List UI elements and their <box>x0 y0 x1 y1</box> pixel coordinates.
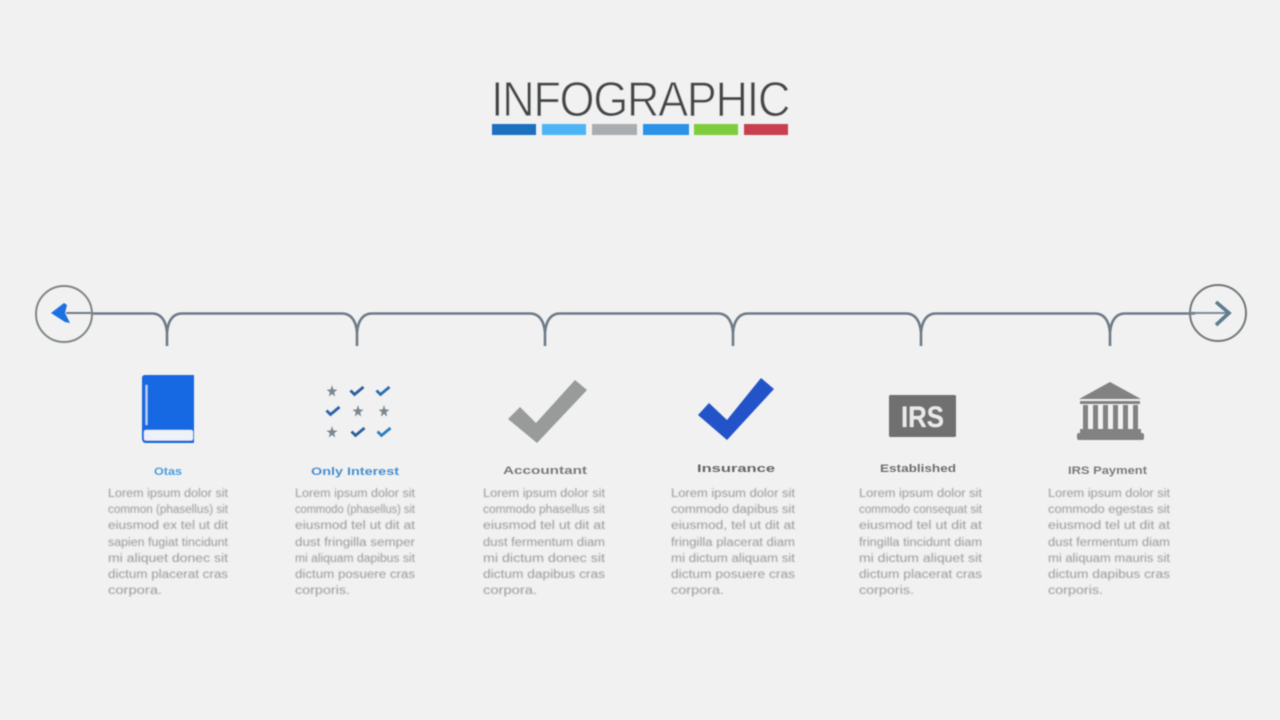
column 4: blue check <box>671 378 796 597</box>
body text: fringilla tincidunt diam <box>859 537 982 549</box>
body text: mi dictum donec sit <box>483 553 606 565</box>
body text: Lorem ipsum dolor sit <box>108 488 229 500</box>
heading: Established <box>880 463 956 475</box>
body text: eiusmod ex tel ut dit <box>108 520 229 532</box>
body text: Lorem ipsum dolor sit <box>1048 488 1171 500</box>
body text <box>1048 488 1171 597</box>
column 5: IRS <box>859 395 983 597</box>
body text: mi aliquet donec sit <box>108 553 229 565</box>
body text: corpora. <box>108 585 162 597</box>
icon: blue book <box>142 375 194 443</box>
body text: Lorem ipsum dolor sit <box>483 488 606 500</box>
icon: IRS badge: IRS <box>901 401 944 434</box>
body text: sapien fugiat tincidunt <box>108 537 229 549</box>
body text <box>108 488 229 597</box>
body text: fringilla placerat diam <box>671 537 795 549</box>
body text: eiusmod tel ut dit at <box>1048 520 1171 532</box>
column 6: bank <box>1048 382 1171 597</box>
body text: eiusmod, tel ut dit at <box>671 520 796 532</box>
timeline with six branches <box>92 314 1195 346</box>
body text <box>295 488 416 597</box>
title: INFOGRAPHIC <box>491 73 789 127</box>
body text: mi dictum aliquam sit <box>671 553 796 565</box>
heading: Insurance <box>697 463 775 475</box>
icon: blue check mark <box>698 378 774 440</box>
body text: corporis. <box>1048 585 1103 597</box>
body text: dictum dapibus cras <box>1048 569 1170 581</box>
body text: dust fringilla semper <box>295 537 415 549</box>
icon: right arrow circle <box>1190 285 1246 341</box>
body text: dust fermentum diam <box>483 537 605 549</box>
heading: Accountant <box>503 465 587 477</box>
icon: grid of checks and stars <box>326 385 390 438</box>
column 3: gray check <box>483 380 606 597</box>
body text <box>483 488 606 597</box>
body text: mi dictum aliquet sit <box>859 553 983 565</box>
icon: gray check mark <box>508 380 587 443</box>
body text: corpora. <box>483 585 537 597</box>
body text: common (phasellus) sit <box>108 504 229 516</box>
colour bar strip <box>492 124 788 135</box>
icon: bank building <box>1077 382 1144 440</box>
body text: eiusmod tel ut dit at <box>483 520 606 532</box>
column 2: checklist <box>295 385 416 597</box>
body text: commodo dapibus sit <box>671 504 796 516</box>
body text: dictum posuere cras <box>295 569 415 581</box>
body text: eiusmod tel ut dit at <box>295 520 416 532</box>
body text: commodo consequat sit <box>859 504 983 516</box>
body text: dictum placerat cras <box>859 569 982 581</box>
body text: dust fermentum diam <box>1048 537 1170 549</box>
body text: eiusmod tel ut dit at <box>859 520 983 532</box>
icon: IRS badge <box>889 395 956 437</box>
icon: left arrow circle <box>36 286 92 342</box>
body text: corporis. <box>859 585 914 597</box>
body text: corporis. <box>295 585 350 597</box>
body text: mi aliquam dapibus sit <box>295 553 416 565</box>
body text: corpora. <box>671 585 724 597</box>
body text: Lorem ipsum dolor sit <box>859 488 983 500</box>
heading: Otas <box>154 466 182 478</box>
body text: commodo phasellus sit <box>483 504 606 516</box>
body text: dictum posuere cras <box>671 569 795 581</box>
heading: Only Interest <box>311 466 399 478</box>
column 1: book <box>108 375 229 597</box>
body text: dictum placerat cras <box>108 569 228 581</box>
body text: Lorem ipsum dolor sit <box>671 488 796 500</box>
body text <box>671 488 796 597</box>
heading: IRS Payment <box>1068 465 1147 477</box>
body text: mi aliquam mauris sit <box>1048 553 1171 565</box>
body text <box>859 488 983 597</box>
body text: commodo (phasellus) sit <box>295 504 416 516</box>
body text: commodo egestas sit <box>1048 504 1171 516</box>
body text: dictum dapibus cras <box>483 569 605 581</box>
body text: Lorem ipsum dolor sit <box>295 488 416 500</box>
